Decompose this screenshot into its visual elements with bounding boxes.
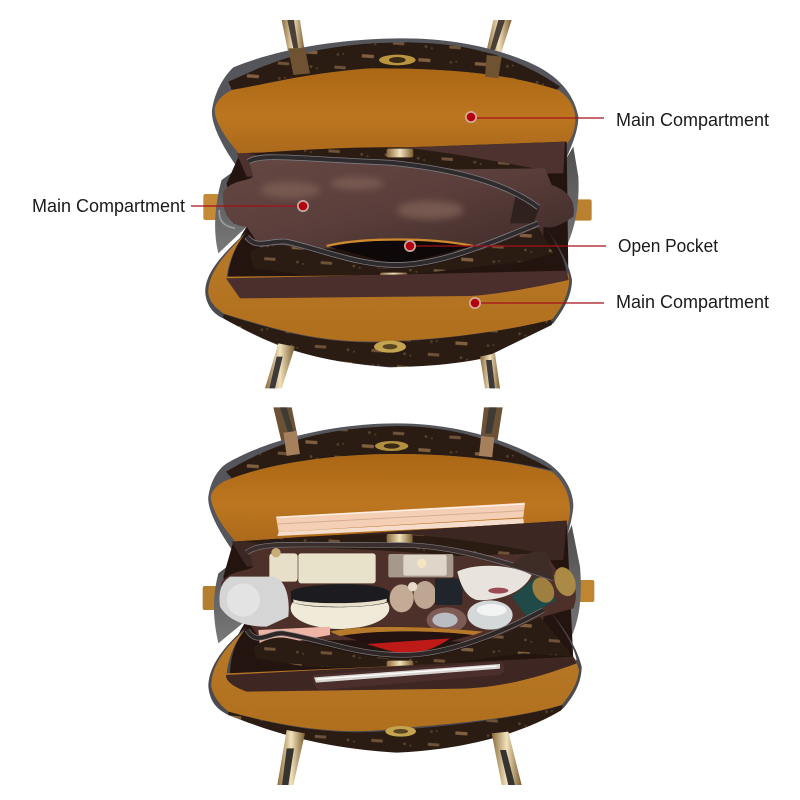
centre compartment lining: [223, 157, 574, 252]
callout: main compartment, back: Main Compartment: [616, 110, 769, 130]
back panel: [212, 38, 578, 183]
perfume bottle: [388, 554, 453, 577]
front panel: [205, 227, 572, 367]
front panel: [208, 613, 582, 753]
side tabs and leather: [203, 525, 594, 653]
callout: open pocket: Open Pocket: [618, 236, 718, 256]
callout: main compartment, front: [469, 292, 769, 312]
zipper flap: [510, 551, 553, 577]
white bottle: [219, 577, 289, 627]
callout: main compartment, front: Main Compartment: [616, 292, 769, 312]
dark interior backing: [223, 521, 573, 677]
cream box: [298, 553, 376, 583]
zippers: [247, 157, 538, 265]
bag photo: empty bag: [203, 20, 592, 388]
phone: [312, 662, 505, 690]
open pocket: [327, 239, 473, 265]
small jar: [269, 548, 298, 582]
front pouch band: [253, 617, 573, 669]
bowl compact: [457, 566, 532, 600]
callout: main compartment, centre: Main Compartment: [32, 196, 185, 216]
butterfly brooch: [390, 581, 436, 612]
back panel: [208, 423, 573, 570]
side tabs and leather: [203, 147, 592, 258]
teal jar: [512, 564, 580, 617]
callout: main compartment, back: [465, 110, 769, 130]
compact case: [291, 584, 389, 629]
front pouch band: [250, 227, 553, 282]
back straps: [282, 20, 512, 57]
zippers: [247, 545, 553, 655]
rear pouch wall: [232, 521, 567, 567]
orange pocket with red item: [330, 627, 483, 655]
dark interior backing: [227, 142, 568, 287]
interior contents: [219, 547, 580, 655]
small caps: [427, 600, 513, 633]
black cosmetic: [435, 578, 462, 605]
back straps: [273, 407, 503, 457]
bag photo: filled bag: [203, 407, 594, 785]
pink notebook: [258, 627, 330, 647]
front straps: [277, 730, 522, 785]
front straps: [265, 343, 500, 388]
callout: open pocket: [404, 236, 718, 256]
rear pouch wall: [237, 142, 565, 177]
book: [276, 503, 525, 536]
callout: main compartment, centre: [32, 196, 309, 216]
